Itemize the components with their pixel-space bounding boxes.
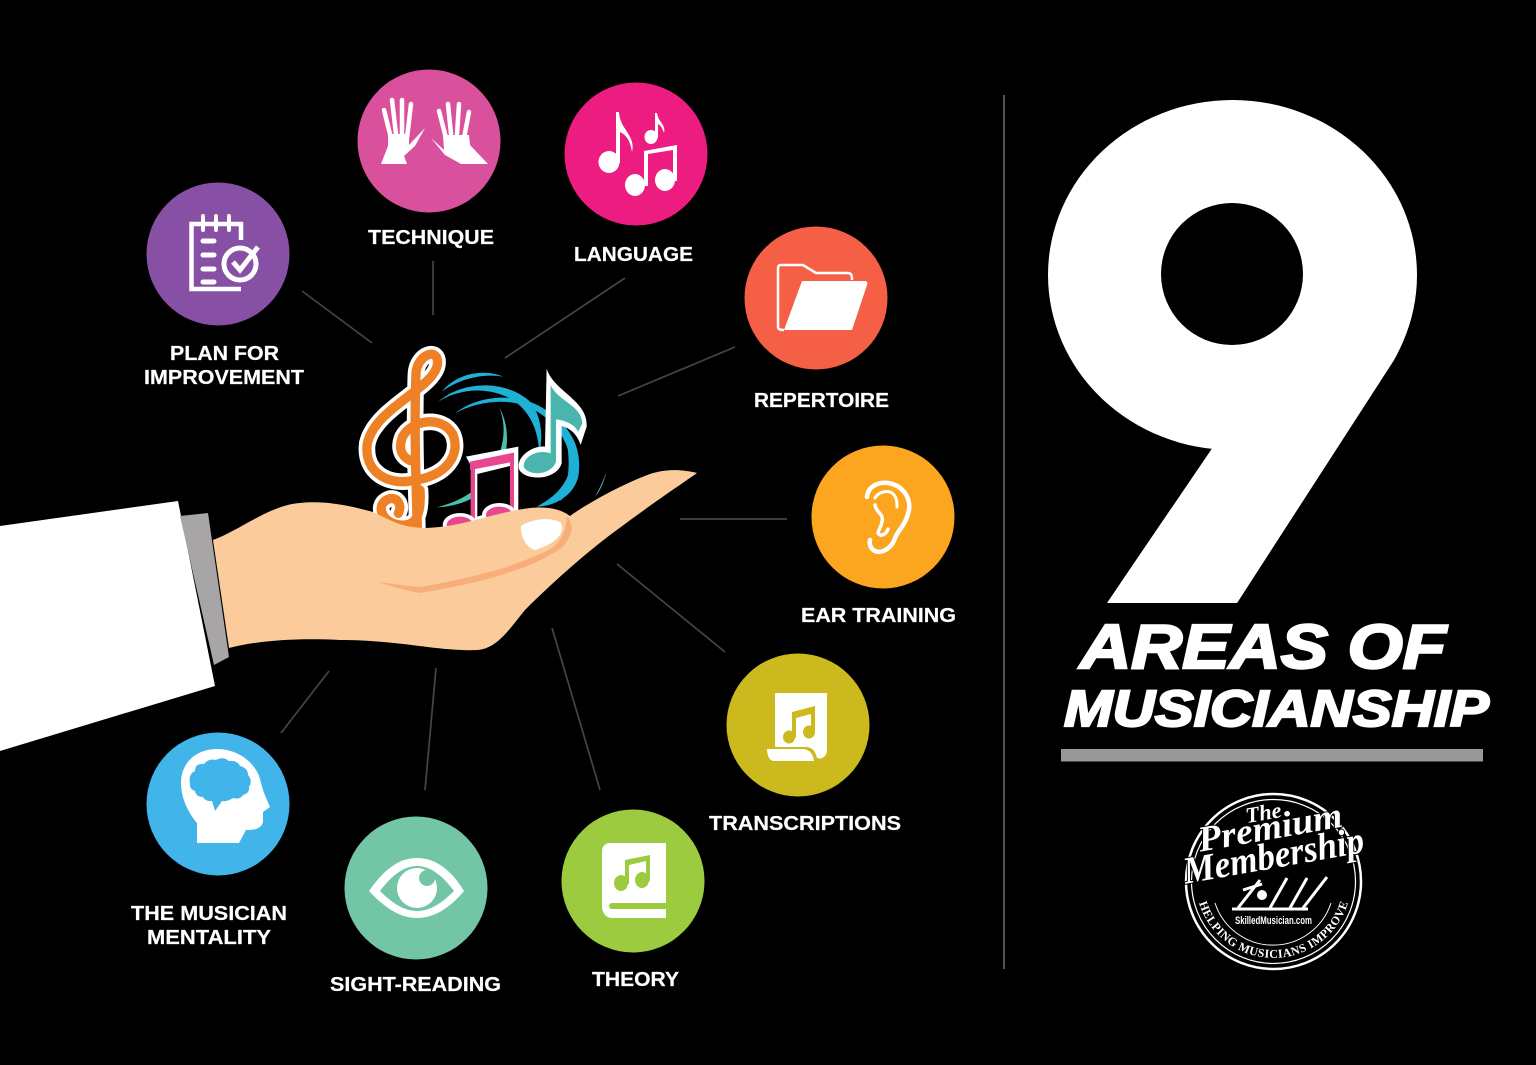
icon: hand crease: [377, 516, 572, 593]
icon: clipboard with check: [192, 216, 258, 289]
label: language: LANGUAGE: [574, 244, 693, 266]
icon: head with brain: [181, 749, 270, 843]
heading: areas of musicianship: MUSICIANSHIP: [1064, 680, 1490, 737]
icon: open hand: [213, 470, 697, 650]
label: transcriptions: TRANSCRIPTIONS: [709, 813, 901, 835]
icon: thumbnail: [521, 519, 562, 550]
label: the musician mentality: MENTALITY: [147, 927, 272, 949]
icon: piano keys: [1232, 877, 1327, 909]
badge: sight-reading: [330, 816, 501, 996]
heading: areas of musicianship: [1064, 613, 1490, 737]
logo: the premium membership: The: [1243, 797, 1283, 828]
badge: theory: [562, 810, 704, 991]
label: ear training: EAR TRAINING: [801, 605, 956, 627]
badge: ear training: [801, 446, 956, 627]
logo: the premium membership: HELPING MUSICIANS IMPROVE: [1199, 900, 1348, 958]
badge: technique: [358, 70, 500, 249]
label: the musician mentality: [131, 903, 287, 949]
label: repertoire: REPERTOIRE: [754, 390, 889, 412]
label: plan for improvement: PLAN FOR: [170, 343, 280, 365]
icon: music book: [602, 843, 666, 918]
heading: big number nine: [1048, 100, 1417, 603]
label: plan for improvement: IMPROVEMENT: [144, 367, 304, 389]
icon: eye: [369, 858, 464, 918]
label: theory: THEORY: [592, 969, 680, 991]
heading: areas of musicianship: AREAS OF: [1078, 613, 1448, 682]
icon: grey cuff: [180, 513, 229, 665]
icon: two hands: [381, 100, 488, 164]
badge: plan for improvement: [144, 182, 304, 389]
label: sight-reading: SIGHT-READING: [330, 974, 501, 996]
logo: the premium membership: SkilledMusician.com: [1235, 915, 1312, 927]
label: technique: TECHNIQUE: [368, 227, 494, 249]
icon: ear: [867, 483, 909, 552]
logo: the premium membership: Premium: [1194, 795, 1345, 860]
badge: transcriptions: [709, 654, 901, 835]
icon: music cluster: [367, 354, 607, 537]
icon: folder: [778, 265, 867, 330]
logo: the premium membership: [1179, 792, 1367, 970]
badge: language: [564, 82, 708, 266]
icon: music notes: [598, 112, 677, 196]
icon: shirt sleeve: [0, 501, 215, 751]
label: the musician mentality: THE MUSICIAN: [131, 903, 287, 925]
panel: hand holding music: [0, 354, 697, 751]
label: plan for improvement: [144, 343, 304, 389]
logo: the premium membership: Membership: [1179, 819, 1367, 893]
badge: the musician mentality: [131, 732, 290, 949]
icon: sheet scroll: [767, 693, 827, 761]
badge: repertoire: [744, 226, 889, 412]
